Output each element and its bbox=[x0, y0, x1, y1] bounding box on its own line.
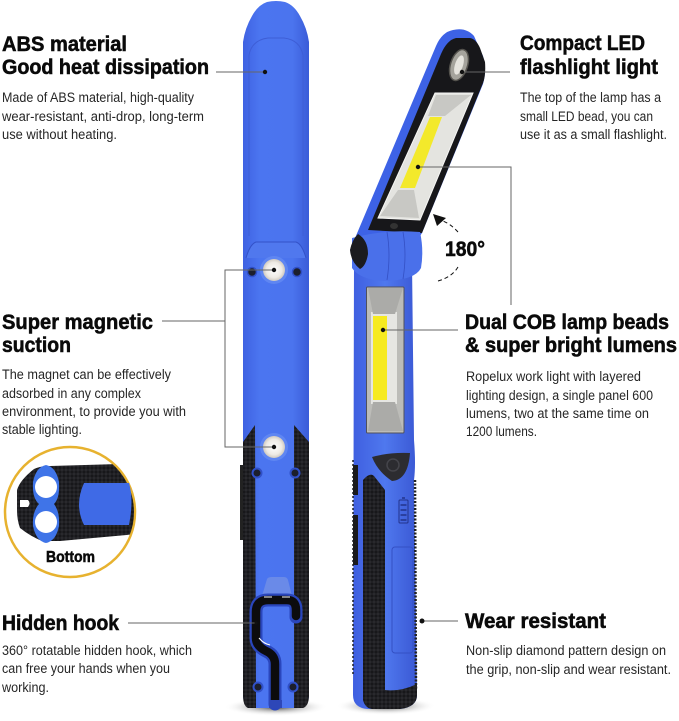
head screw bbox=[390, 223, 398, 229]
text: ABS description: use without heating. bbox=[2, 127, 117, 142]
text: magnet description: stable lighting. bbox=[2, 422, 82, 437]
heading: super magnetic suction bbox=[2, 310, 153, 357]
upper cover panel bbox=[249, 38, 303, 236]
gold ring bbox=[5, 447, 135, 577]
upper dashed arc bbox=[440, 220, 458, 232]
text: dual COB description: 1200 lumens. bbox=[466, 424, 537, 439]
text: ABS description: wear-resistant, anti-drop, long-term bbox=[1, 109, 204, 124]
reflector facets bbox=[380, 95, 471, 218]
base shadow bbox=[336, 697, 436, 715]
head reflector bbox=[378, 93, 473, 220]
text: dual COB description: lighting design, a single panel 600 bbox=[466, 388, 653, 403]
lower dashed arc bbox=[438, 267, 458, 281]
leader line: super magnetic suction bbox=[162, 268, 276, 449]
label: Bottom bbox=[46, 549, 95, 566]
hook highlights bbox=[259, 597, 290, 645]
text: dual COB description: Ropelux work light with layered bbox=[466, 369, 641, 384]
end cap bbox=[33, 465, 59, 543]
inset: bottom view bbox=[5, 447, 137, 577]
text: hook description: 360° rotatable hidden hook, which bbox=[2, 643, 192, 658]
text: dual COB description: lumens, two at the same time on bbox=[466, 406, 649, 421]
leader line: dual COB body bbox=[381, 328, 458, 332]
notch bbox=[20, 500, 30, 507]
text: dual COB description bbox=[466, 369, 653, 439]
head COB panel bbox=[400, 117, 442, 188]
heading: super magnetic suction: suction bbox=[2, 333, 71, 357]
lower magnet bbox=[260, 433, 288, 461]
inner reflector bbox=[371, 312, 397, 404]
heading: compact LED: flashlight light bbox=[520, 55, 658, 79]
hook notch bbox=[262, 577, 292, 596]
text: ABS description: Made of ABS material, high-quality bbox=[2, 90, 194, 105]
right lamp, front view bbox=[336, 29, 485, 715]
text: hook description bbox=[1, 643, 192, 695]
text: ABS description bbox=[1, 90, 204, 142]
text: compact LED description bbox=[520, 90, 667, 142]
heading: hidden hook: Hidden hook bbox=[2, 611, 119, 635]
heading: wear resistant: Wear resistant bbox=[465, 609, 606, 633]
upper screws bbox=[248, 268, 302, 276]
upper magnet bbox=[260, 256, 288, 284]
body bbox=[353, 262, 417, 709]
battery holes bbox=[35, 476, 57, 533]
hook recess bbox=[256, 600, 296, 704]
text: wear resistant description bbox=[466, 643, 671, 677]
head shell bbox=[350, 29, 485, 263]
heading: ABS material: ABS material bbox=[2, 32, 127, 56]
grip cylinder bbox=[17, 464, 137, 541]
text: magnet description: adsorbed in any complex bbox=[2, 386, 141, 401]
text: magnet description: environment, to provide you with bbox=[2, 404, 186, 419]
blue inset bbox=[79, 483, 132, 525]
side buttons bbox=[353, 465, 358, 565]
lower light panel bbox=[366, 287, 404, 433]
grip right bbox=[294, 425, 309, 708]
arrowhead bbox=[433, 214, 446, 226]
text: compact LED description: The top of the lamp has a bbox=[520, 90, 661, 105]
lamp body bbox=[243, 1, 309, 708]
heading: ABS material bbox=[2, 32, 209, 79]
heading: compact LED bbox=[520, 31, 658, 79]
grip bbox=[363, 475, 417, 709]
hinge barrel bbox=[352, 231, 422, 281]
small LED lens bbox=[446, 47, 472, 83]
text: wear resistant description: the grip, non-slip and wear resistant. bbox=[466, 662, 671, 677]
grip left bbox=[243, 425, 256, 708]
text: magnet description bbox=[2, 367, 186, 437]
rotation marker: 180 degrees bbox=[433, 214, 485, 281]
heading: dual COB bbox=[465, 310, 677, 357]
heading: super magnetic suction: Super magnetic bbox=[2, 310, 153, 334]
reflector facets bbox=[368, 288, 403, 431]
text: wear resistant description: Non-slip diamond pattern design on bbox=[466, 643, 666, 658]
heading: compact LED: Compact LED bbox=[520, 31, 645, 55]
label: 180° bbox=[445, 237, 485, 261]
hinge seam bbox=[246, 242, 306, 258]
text: compact LED description: use it as a small flashlight. bbox=[520, 127, 667, 142]
power button bbox=[372, 453, 410, 481]
battery indicator bbox=[399, 498, 408, 523]
leader line: compact LED bbox=[460, 70, 510, 74]
hinge seams bbox=[387, 232, 405, 280]
textured left edge bbox=[352, 460, 354, 675]
hook bbox=[256, 600, 296, 702]
text: magnet description: The magnet can be effectively bbox=[2, 367, 171, 382]
textured right edge bbox=[415, 480, 416, 690]
base shadow bbox=[224, 698, 328, 716]
text: hook description: can free your hands when you bbox=[2, 661, 170, 676]
bottom tip bbox=[269, 700, 282, 708]
COB panel bbox=[373, 316, 387, 400]
side buttons bbox=[240, 232, 309, 540]
leader line: ABS material bbox=[216, 70, 267, 74]
head bezel bbox=[368, 38, 485, 233]
left lamp, back view bbox=[224, 1, 328, 716]
lower screws bbox=[252, 468, 300, 692]
text: compact LED description: small LED bead, you can bbox=[520, 109, 653, 124]
leader line: dual COB head bbox=[416, 165, 511, 305]
hinge black end bbox=[350, 234, 368, 269]
leader line: hidden hook bbox=[128, 622, 258, 624]
battery door bbox=[392, 547, 413, 653]
folded head bbox=[350, 29, 485, 263]
leader line: wear resistant bbox=[420, 618, 458, 624]
text: hook description: working. bbox=[1, 680, 49, 695]
heading: ABS material: Good heat dissipation bbox=[2, 55, 209, 79]
